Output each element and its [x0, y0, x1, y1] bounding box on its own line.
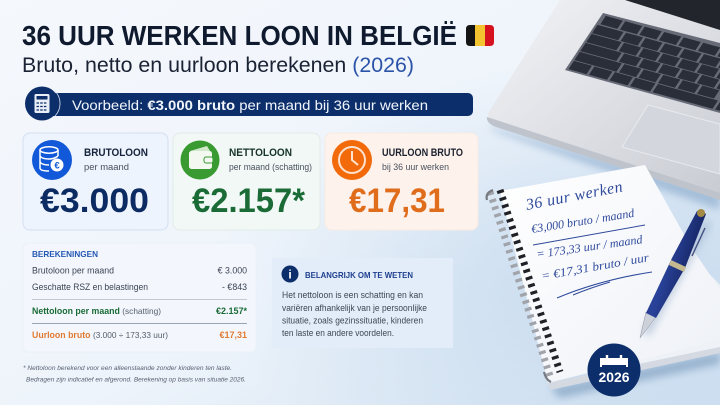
- sublabel: per maand: [84, 162, 129, 173]
- row: RSZ: [32, 282, 247, 292]
- heading: BELANGRIJK OM TE WETEN: [305, 270, 413, 280]
- panel: uurloon: [325, 133, 478, 230]
- icon: info: [282, 266, 298, 282]
- body text: Het nettoloon is een schatting en kan: [282, 290, 423, 300]
- example banner: [25, 86, 473, 120]
- label: BRUTOLOON: [84, 147, 148, 159]
- label: UURLOON BRUTO: [382, 147, 463, 159]
- laptop: [487, 0, 720, 210]
- icon: info: i: [288, 268, 292, 282]
- row: brutoloon: Brutoloon per maand: [32, 266, 114, 276]
- body text: ten laste en andere voordelen.: [282, 328, 394, 338]
- heading: BEREKENINGEN: [32, 249, 98, 259]
- panel: belangrijk om te weten: [272, 258, 453, 348]
- handwriting: bruto per maand: €3,000 bruto / maand: [530, 206, 636, 236]
- body text: situatie, zoals gezinssituatie, kinderen: [282, 316, 423, 326]
- handwriting: 36 uur werken: 36 uur werken: [524, 179, 624, 214]
- value: €2.157*: [192, 182, 306, 220]
- footnote: * Nettoloon berekend voor een alleenstaande zonder kinderen ten laste.: [23, 365, 232, 372]
- row: uurloon: [32, 330, 247, 340]
- pen: [640, 209, 708, 338]
- panel: berekeningen: [23, 243, 256, 352]
- row: RSZ: Geschatte RSZ en belastingen: [32, 282, 148, 292]
- icon: Belgian flag: [466, 25, 494, 46]
- icon: wallet: [180, 140, 220, 180]
- icon: clock: [332, 140, 372, 180]
- value: €17,31: [349, 182, 445, 220]
- row: RSZ: - €843: [222, 282, 247, 292]
- body text: variëren afhankelijk van je persoonlijke: [282, 303, 427, 313]
- row: uurloon: Uurloon bruto (3.000 ÷ 173,33 uur): [32, 330, 168, 340]
- handwriting: uur per maand: = 173,33 uur / maand: [535, 232, 644, 261]
- badge: 2026: [588, 344, 640, 396]
- notebook: [487, 165, 720, 398]
- row: brutoloon: € 3.000: [218, 266, 247, 276]
- footnote: Bedragen zijn indicatief en afgerond. Berekening op basis van situatie 2026.: [26, 376, 246, 384]
- title: 36 UUR WERKEN LOON IN BELGIË: [22, 20, 457, 51]
- row: nettoloon: Nettoloon per maand (schatting): [32, 306, 161, 316]
- icon: calculator: [34, 94, 50, 113]
- year: 2026: [598, 369, 630, 385]
- panel: nettoloon: [173, 133, 320, 230]
- sublabel: bij 36 uur werken: [382, 162, 449, 173]
- icon: coins with euro: €: [54, 160, 60, 172]
- icon: calendar: [601, 355, 627, 367]
- row: nettoloon: €2.157*: [216, 306, 247, 316]
- row: nettoloon: [32, 306, 247, 316]
- body text: [282, 290, 427, 338]
- panel: brutoloon: [23, 133, 168, 230]
- row: brutoloon: [32, 266, 247, 276]
- subtitle: Bruto, netto en uurloon berekenen (2026): [22, 53, 414, 77]
- value: €3.000: [40, 182, 149, 220]
- footnote: [23, 365, 246, 384]
- label: NETTOLOON: [229, 147, 292, 159]
- spiral binding: [487, 190, 560, 382]
- banner text: Voorbeeld: €3.000 bruto per maand bij 36 uur werken: [72, 97, 428, 113]
- icon: coins with euro: [32, 140, 72, 180]
- row: uurloon: €17,31: [219, 330, 247, 340]
- sublabel: per maand (schatting): [229, 162, 312, 173]
- handwriting: bruto per uur: = €17,31 bruto / uur: [540, 250, 650, 283]
